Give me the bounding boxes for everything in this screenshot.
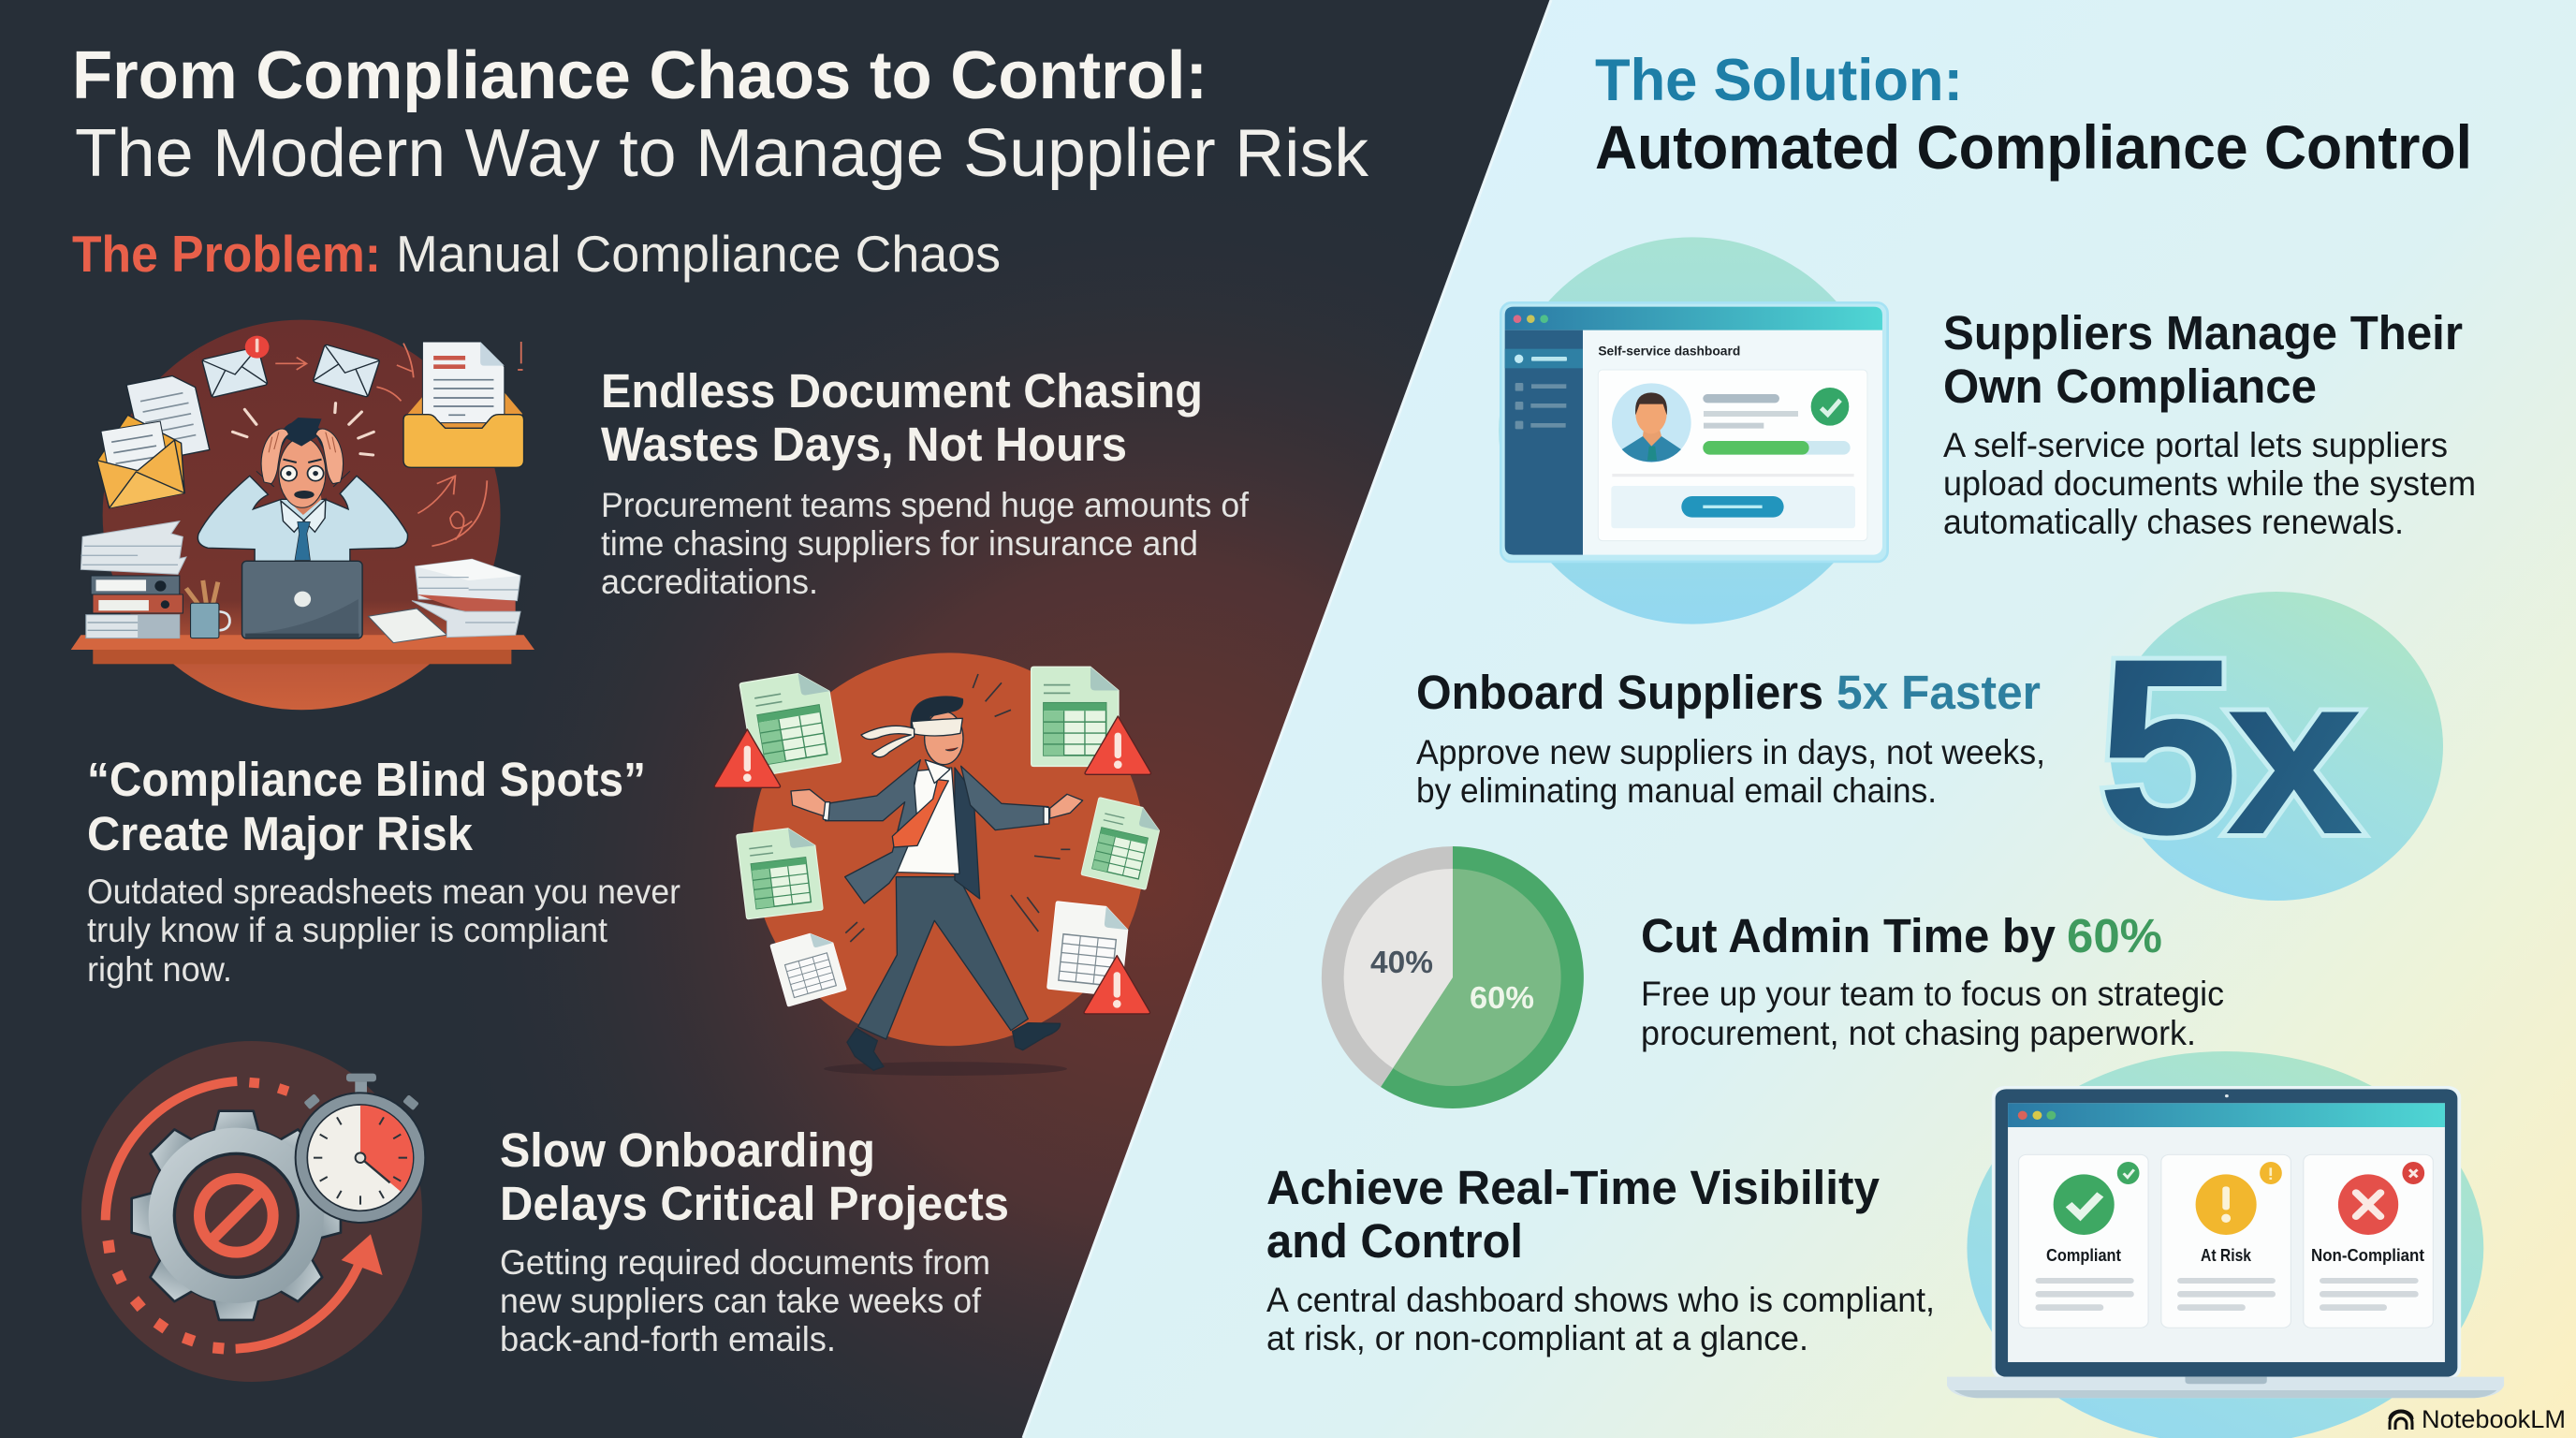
icon: walking man [791,697,1083,1070]
text block: suppliers manage their own compliance: upload documents while the system [1943,464,2476,503]
text block: cut admin time by 60%: 60% [2067,909,2162,962]
text block: real-time visibility: at risk, or non-compliant at a glance. [1266,1319,1808,1357]
labels: dashboard statuses: Non-Compliant [2311,1246,2424,1265]
icon: open yellow envelope [97,415,184,508]
labels: dashboard statuses [2046,1246,2424,1265]
text block: cut admin time by 60%: Cut Admin Time by [1641,909,2056,962]
icon: dashed delay arc [102,1078,383,1354]
text block: compliance blind spots: Outdated spreadsheets mean you never [87,873,681,911]
text block: suppliers manage their own compliance: Own Compliance [1943,360,2317,413]
icon: envelope [313,345,380,397]
icon: warning triangles [714,716,1151,1014]
status card: at risk [2161,1154,2291,1328]
text block: endless document chasing: accreditations. [601,563,818,601]
title: From Compliance Chaos to Control: [72,38,1208,113]
text block: onboard suppliers 5x faster [1416,666,2045,810]
big 5x figure: 5 [2097,606,2239,887]
text block: endless document chasing [601,364,1250,601]
icon: gear [132,1111,341,1320]
text block: slow onboarding: Delays Critical Projects [500,1177,1009,1230]
big 5x figure: x [2225,625,2364,882]
status card: compliant [2019,1154,2148,1328]
pie chart: 60 percent admin time cut: 60% [1470,980,1534,1015]
icon: worried man [198,418,407,562]
solution heading: Automated Compliance Control [1595,112,2472,182]
text block: onboard suppliers 5x faster: Approve new suppliers in days, not weeks, [1416,733,2045,771]
solution heading: The Solution: [1595,48,1963,113]
icon: spreadsheet documents [737,667,1164,1006]
labels: dashboard statuses: Compliant [2046,1246,2121,1265]
status card: non-compliant [2304,1154,2433,1328]
icon: right document stack [369,559,520,643]
problem heading: Manual Compliance Chaos [396,225,1001,283]
text block: suppliers manage their own compliance: A self-service portal lets suppliers [1943,426,2448,464]
text block: real-time visibility: and Control [1266,1214,1523,1268]
title [72,38,1369,191]
text block: compliance blind spots: right now. [87,950,232,989]
icon: overwhelmed man at desk [71,320,534,710]
text block: real-time visibility: A central dashboard shows who is compliant, [1266,1281,1935,1319]
pie chart: 60 percent admin time cut [1322,846,1584,1108]
icon: desk [71,635,534,664]
icon: red arrows and scribbles [275,342,523,546]
text block: cut admin time by 60%: Free up your team to focus on strategic [1641,975,2224,1013]
text block: onboard suppliers 5x faster: Onboard Suppliers [1416,666,1823,719]
panel: the problem (dark side) [0,0,1551,1438]
problem heading: The Problem: [72,225,381,283]
big 5x figure [2097,606,2364,887]
text block: endless document chasing: Procurement teams spend huge amounts of [601,486,1250,524]
text block: onboard suppliers 5x faster: by eliminating manual email chains. [1416,771,1937,810]
text block: slow onboarding: new suppliers can take weeks of [500,1282,982,1320]
solution heading [1595,48,2472,182]
problem heading [72,225,1001,283]
text block: cut admin time by 60% [1641,909,2224,1052]
icon: envelope with alert [202,336,269,398]
icon: blindfolded man and spreadsheets [714,653,1164,1076]
title: The Modern Way to Manage Supplier Risk [75,116,1369,191]
text block: slow onboarding [500,1123,1009,1358]
icon: stopwatch [296,1074,425,1223]
text block: onboard suppliers 5x faster: 5x Faster [1837,666,2041,719]
icon: laptop [242,561,362,638]
icon: motion lines [845,674,1070,942]
icon: self-service portal window [1499,237,1888,624]
text block: compliance blind spots [87,753,681,989]
icon: left document stack [80,521,186,638]
text block: endless document chasing: time chasing suppliers for insurance and [601,524,1198,563]
text block: suppliers manage their own compliance [1943,306,2476,541]
logo: NotebookLM: NotebookLM [2422,1405,2566,1433]
icon: mug with pencils [186,580,229,638]
panel: the solution [1266,48,2566,1438]
text block: suppliers manage their own compliance: automatically chases renewals. [1943,503,2404,541]
icon: gear and stopwatch [81,1041,425,1382]
text block: endless document chasing: Endless Document Chasing [601,364,1203,418]
pie chart: 60 percent admin time cut: 40% [1370,945,1433,979]
text block: real-time visibility: Achieve Real-Time Visibility [1266,1161,1881,1214]
icon: yellow document tray [403,342,524,467]
icon: laptop dashboard [1947,1051,2504,1438]
text block: endless document chasing: Wastes Days, Not Hours [601,418,1127,471]
circle behind 5x [2110,592,2443,901]
text block: slow onboarding: Getting required documents from [500,1243,990,1282]
icon: loose paper [126,372,210,462]
label: self-service dashboard: Self-service dashboard [1598,343,1740,358]
text block: cut admin time by 60%: procurement, not chasing paperwork. [1641,1014,2196,1052]
labels: dashboard statuses: At Risk [2201,1246,2252,1265]
text block: slow onboarding: back-and-forth emails. [500,1320,836,1358]
text block: real-time visibility [1266,1161,1935,1357]
icon: stress marks [233,404,373,455]
text block: suppliers manage their own compliance: Suppliers Manage Their [1943,306,2463,360]
text block: slow onboarding: Slow Onboarding [500,1123,875,1177]
text block: compliance blind spots: truly know if a supplier is compliant [87,911,608,949]
text block: compliance blind spots: “Compliance Blind Spots” [87,753,646,806]
icon: supplier avatar [1612,383,1691,462]
text block: compliance blind spots: Create Major Risk [87,807,474,860]
